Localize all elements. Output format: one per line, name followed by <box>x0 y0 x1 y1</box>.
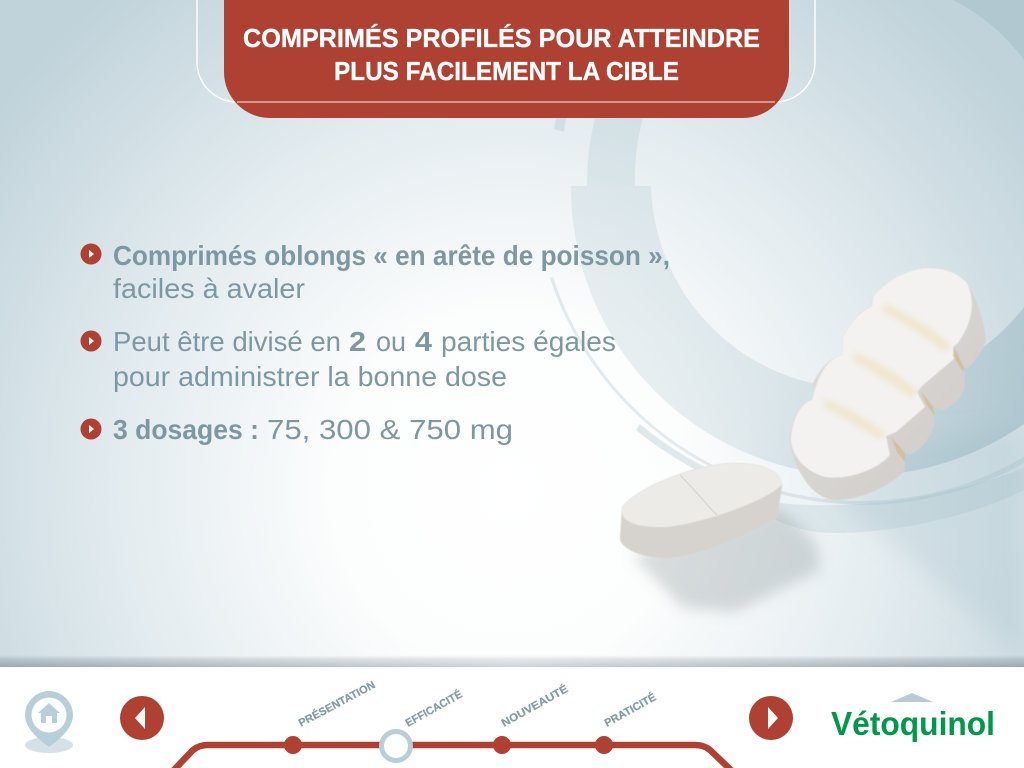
tablet body <box>620 463 782 558</box>
footer panel <box>0 667 1024 768</box>
title text <box>243 23 760 86</box>
bullet 2: ou <box>376 326 406 357</box>
station: efficacité <box>382 732 410 760</box>
previous button <box>120 696 164 740</box>
bullet 2: 2 <box>349 326 366 357</box>
bullet 2: 4 <box>415 326 432 357</box>
bullet 1: Comprimés oblongs « en arête de poisson », <box>113 240 670 271</box>
navigation labels: EFFICACITÉ <box>403 688 465 730</box>
large tablet body <box>790 268 986 500</box>
tablet top face <box>621 463 782 527</box>
bullet 1 <box>80 240 670 304</box>
title text: PLUS FACILEMENT LA CIBLE <box>334 56 679 86</box>
station: nouveauté <box>493 736 511 754</box>
title text: COMPRIMÉS PROFILÉS POUR ATTEINDRE <box>243 23 760 53</box>
large tablet grooves <box>822 303 952 440</box>
next button <box>749 696 793 740</box>
large tablet <box>790 268 986 500</box>
tablet score line <box>680 475 717 515</box>
footer shadow strip <box>0 655 1024 667</box>
bullet 1: faciles à avaler <box>113 273 305 304</box>
station: praticité <box>595 736 613 754</box>
title banner <box>197 0 815 118</box>
tablet shadow <box>633 508 820 612</box>
bullet 3: 75, 300 & 750 mg <box>267 414 513 445</box>
logo: Vétoquinol <box>831 705 995 742</box>
navigation labels <box>296 678 658 730</box>
navigation labels: PRATICITÉ <box>602 691 658 730</box>
navigation line <box>172 732 733 768</box>
bullet 2: Peut être divisé en <box>113 326 341 357</box>
bullet 2 <box>80 326 616 392</box>
bullet 3 <box>80 414 513 445</box>
banner outline <box>197 0 815 102</box>
station: présentation <box>284 736 302 754</box>
bullet 2: parties égales <box>441 326 616 357</box>
banner outline over panel <box>237 101 775 103</box>
large tablet top surface <box>791 268 972 478</box>
home icon <box>25 691 73 753</box>
bullet 2: pour administrer la bonne dose <box>113 361 507 392</box>
banner panel <box>224 0 789 118</box>
bullet list <box>80 240 670 445</box>
navigation labels: NOUVEAUTÉ <box>499 682 570 730</box>
small tablet <box>620 463 820 612</box>
bullet 3: 3 dosages : <box>113 414 259 445</box>
navigation labels: PRÉSENTATION <box>296 678 378 730</box>
large tablet notches <box>891 347 964 462</box>
